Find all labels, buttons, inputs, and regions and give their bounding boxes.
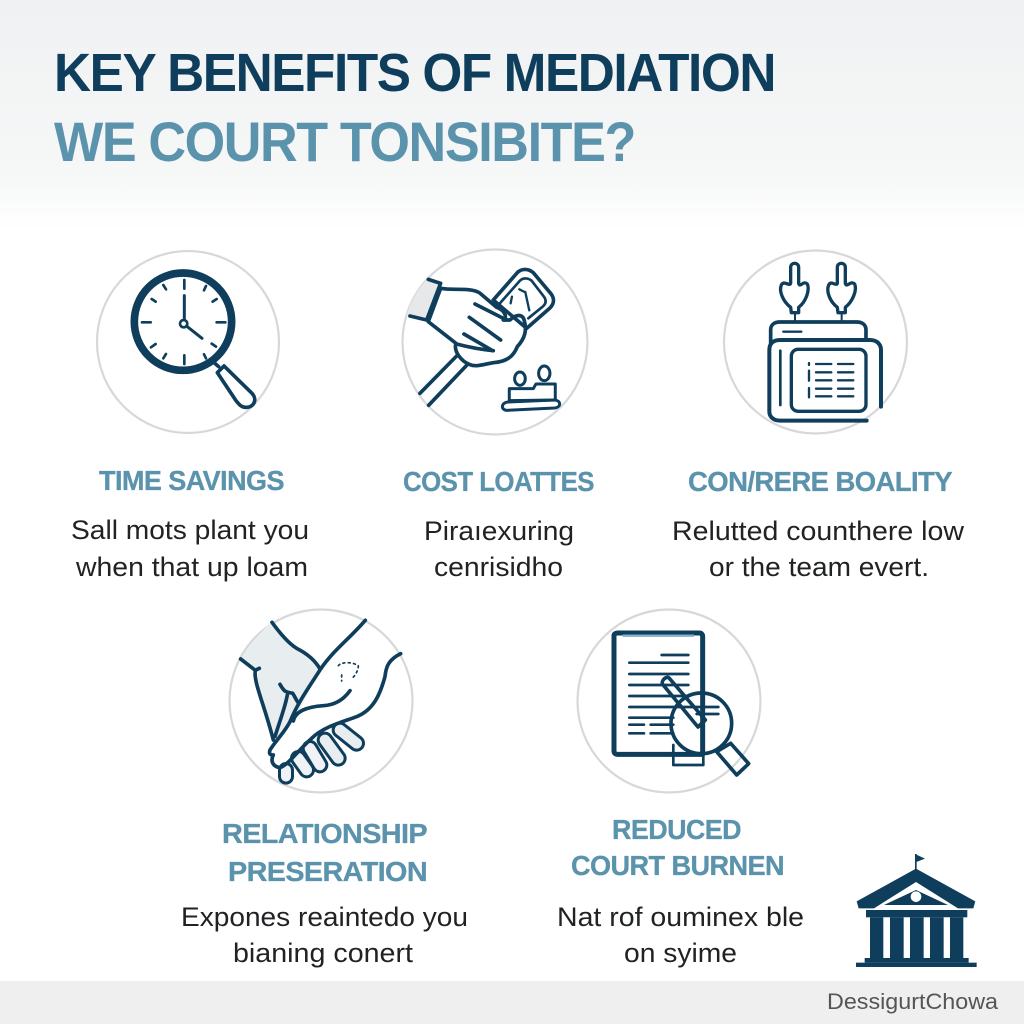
description: relationship preservation: bianing conert bbox=[233, 938, 414, 968]
label: relationship preservation: PRESERATION bbox=[228, 856, 427, 887]
label: reduced court burden: REDUCED bbox=[612, 814, 741, 845]
description: time savings: Sall mots plant you bbox=[71, 515, 309, 545]
description: relationship preservation bbox=[181, 902, 468, 968]
description: reduced court burden: Nat rof ouminex ble bbox=[557, 902, 804, 932]
description: confidentiality: or the team evert. bbox=[709, 552, 929, 582]
panel: relationship preservation bbox=[181, 610, 468, 968]
description: cost: cenrisidho bbox=[434, 552, 563, 582]
description: reduced court burden: on syime bbox=[624, 938, 737, 968]
description: time savings: when that up loam bbox=[75, 552, 308, 582]
panel: time savings bbox=[71, 251, 309, 582]
icon: courthouse bbox=[856, 854, 977, 967]
label: cost: COST LOATTES bbox=[403, 466, 594, 497]
title bbox=[54, 43, 775, 173]
panel: confidentiality bbox=[672, 250, 965, 582]
description: cost bbox=[424, 516, 574, 582]
label: relationship preservation: RELATIONSHIP bbox=[222, 818, 427, 849]
icon: clock magnifier bbox=[134, 273, 255, 407]
panel: cost bbox=[393, 250, 594, 582]
description: relationship preservation: Expones reaintedo you bbox=[181, 902, 468, 932]
title: KEY BENEFITS OF MEDIATION bbox=[54, 43, 775, 103]
title: WE COURT TONSIBITE? bbox=[54, 110, 635, 173]
description: confidentiality: Relutted counthere low bbox=[672, 516, 965, 546]
description: confidentiality bbox=[672, 516, 965, 582]
icon: document and magnifier bbox=[614, 633, 749, 775]
description: reduced court burden bbox=[557, 902, 804, 968]
description: time savings bbox=[71, 515, 309, 582]
label: reduced court burden: COURT BURNEN bbox=[571, 850, 784, 881]
footer band bbox=[0, 981, 1024, 1024]
icon: clasped hands bbox=[241, 620, 401, 777]
description: cost: Piraıexuring bbox=[424, 516, 574, 546]
footer brand text: DessigurtChowa bbox=[827, 989, 999, 1014]
label: time savings: TIME SAVINGS bbox=[99, 465, 284, 496]
icon: plugs and documents bbox=[769, 263, 881, 421]
label: confidentiality: CON/RERE BOALITY bbox=[688, 466, 953, 497]
panel: reduced court burden bbox=[557, 610, 804, 968]
label: relationship preservation bbox=[222, 818, 427, 887]
icon: hands and device bbox=[393, 269, 560, 410]
label: reduced court burden bbox=[571, 814, 784, 881]
